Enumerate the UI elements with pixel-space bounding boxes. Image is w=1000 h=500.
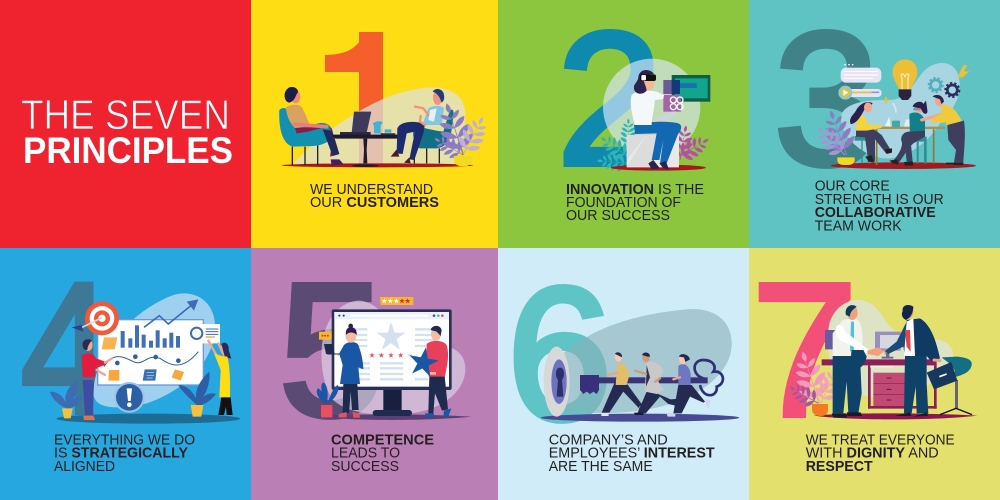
- text: principle 6: ARE THE SAME: [549, 459, 653, 475]
- heading: the seven principles: THE SEVEN: [21, 91, 230, 138]
- illustration: handshake: [785, 300, 977, 419]
- text: principle 3: TEAM WORK: [815, 218, 902, 234]
- text: principle 1: WE UNDERSTAND: [310, 182, 433, 198]
- text: principle 2: INNOVATION IS THE: [566, 182, 704, 198]
- text: principle 7: [806, 433, 955, 475]
- text: principle 1: [310, 182, 439, 211]
- digit 3: 3: [774, 0, 879, 205]
- text: principle 3: STRENGTH IS OUR: [815, 192, 944, 208]
- text: principle 5: LEADS TO: [331, 446, 400, 462]
- digit 1: [325, 32, 383, 164]
- text: principle 6: EMPLOYEES’ INTEREST: [549, 446, 715, 462]
- text: principle 4: IS STRATEGICALLY: [54, 446, 188, 462]
- illustration: strategy board: [50, 293, 240, 424]
- illustration: team collaboration: [810, 59, 976, 169]
- panel: principle 5: [251, 245, 498, 500]
- illustration: innovation VR: [596, 59, 714, 172]
- illustration: competence review: [315, 297, 472, 420]
- text: principle 4: [54, 433, 195, 475]
- text: principle 6: COMPANY’S AND: [549, 433, 668, 449]
- digit 4: 4: [21, 244, 111, 451]
- panel: principle 1: [251, 0, 498, 248]
- text: principle 6: [549, 433, 715, 475]
- panel: principle 4: [0, 244, 251, 500]
- panel: principle 7: [749, 245, 1000, 500]
- text: principle 2: [566, 182, 704, 224]
- panel: principle 2: [498, 0, 749, 248]
- digit 7: 7: [752, 245, 857, 456]
- panel: principle 3: [749, 0, 1000, 248]
- text: principle 2: OUR SUCCESS: [566, 208, 670, 224]
- text: principle 5: [331, 433, 434, 475]
- text: principle 3: COLLABORATIVE: [815, 205, 936, 221]
- illustration: key and door: [541, 309, 739, 422]
- digit 6: 6: [507, 249, 612, 460]
- text: principle 7: WE TREAT EVERYONE: [806, 433, 955, 449]
- text: principle 5: COMPETENCE: [331, 433, 434, 449]
- panel: title: [0, 0, 251, 248]
- illustration: customer meeting: [279, 87, 494, 167]
- text: principle 1: OUR CUSTOMERS: [310, 195, 439, 211]
- text: principle 3: OUR CORE: [815, 178, 890, 194]
- text: principle 3: [815, 178, 944, 234]
- text: principle 4: EVERYTHING WE DO: [54, 433, 195, 449]
- digit 2: 2: [557, 0, 662, 205]
- text: principle 4: ALIGNED: [54, 459, 115, 475]
- text: principle 5: SUCCESS: [331, 459, 399, 475]
- text: principle 7: RESPECT: [806, 459, 873, 475]
- text: principle 2: FOUNDATION OF: [566, 195, 681, 211]
- text: principle 7: WITH DIGNITY AND: [806, 446, 939, 462]
- heading: the seven principles: [21, 91, 233, 171]
- digit 5: 5: [279, 245, 384, 456]
- heading: the seven principles: PRINCIPLES: [23, 130, 233, 171]
- panel: principle 6: [498, 248, 749, 500]
